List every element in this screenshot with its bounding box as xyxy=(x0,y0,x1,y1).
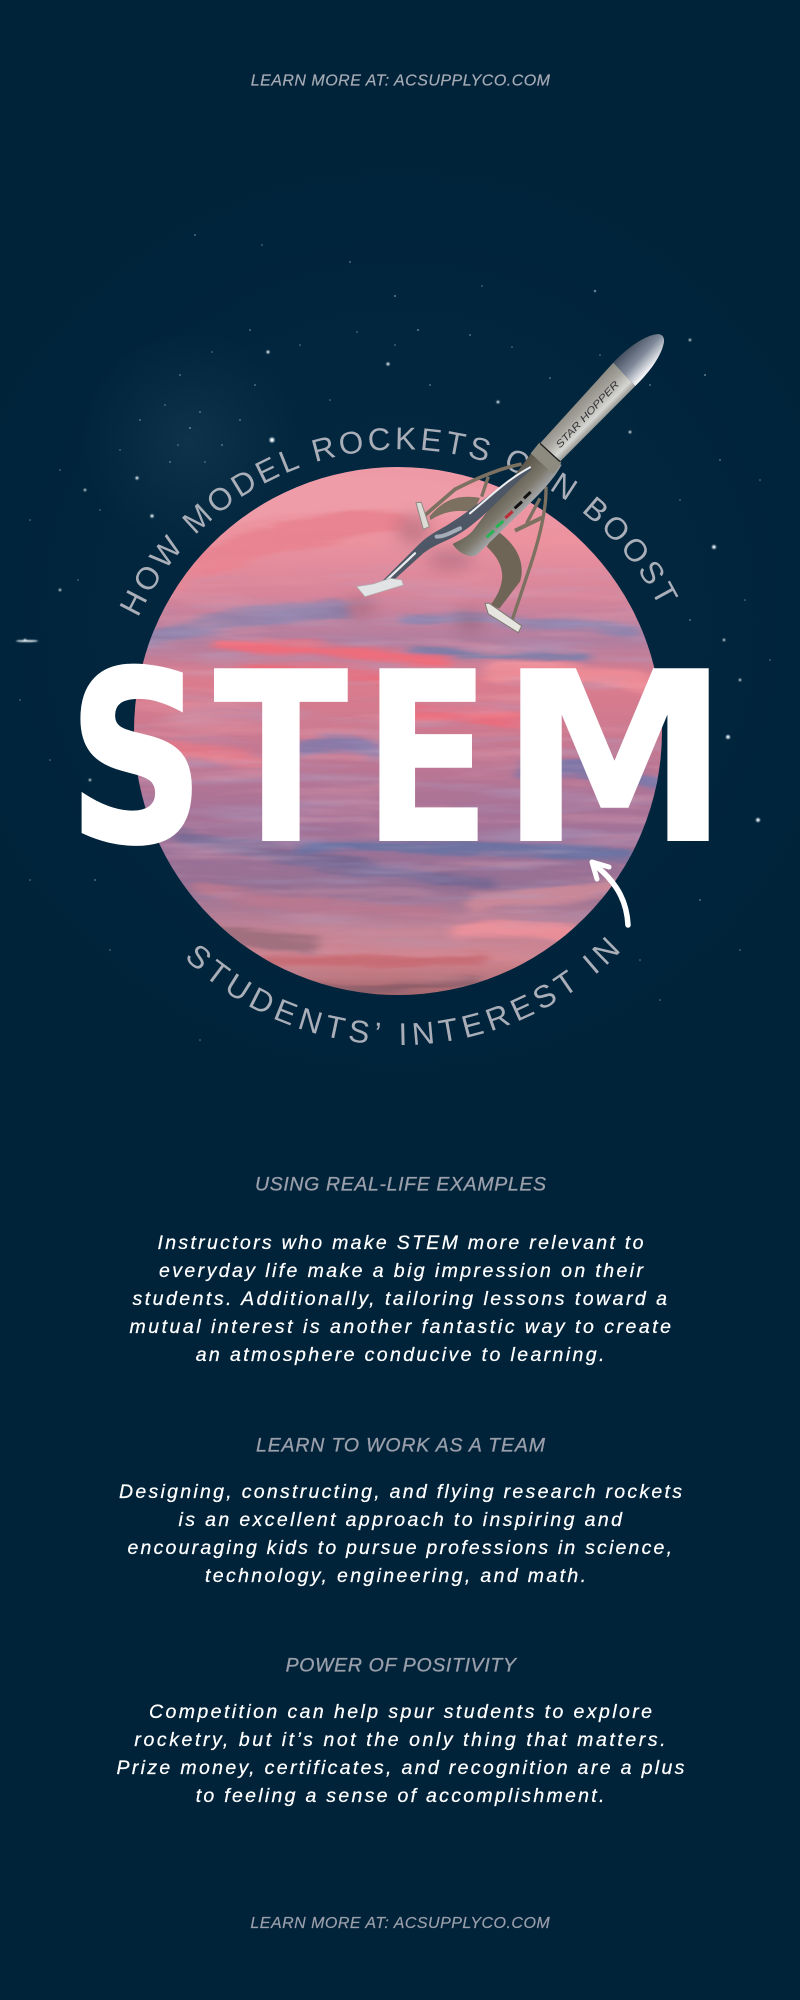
section 2 body: technology, engineering, and math. xyxy=(205,1565,586,1587)
curved heading: top: HOW MODEL ROCKETS CAN BOOST xyxy=(120,428,678,616)
section 2 body: is an excellent approach to inspiring and xyxy=(178,1509,623,1531)
section 2 body: encouraging kids to pursue professions in science, xyxy=(128,1537,672,1559)
starfield xyxy=(0,150,800,1150)
section 1 xyxy=(130,1174,671,1366)
section 3 heading: POWER OF POSITIVITY xyxy=(286,1655,518,1677)
section 3 body: Competition can help spur students to explore xyxy=(149,1701,652,1723)
section 3 body: Prize money, certificates, and recognition are a plus xyxy=(116,1757,685,1779)
section 3 body xyxy=(116,1701,685,1807)
nose cone xyxy=(613,334,664,386)
section 1 body: everyday life make a big impression on their xyxy=(159,1260,644,1282)
section 1 body: mutual interest is another fantastic way to create xyxy=(130,1316,671,1338)
section 3 body: to feeling a sense of accomplishment. xyxy=(196,1785,604,1807)
section 2 heading: LEARN TO WORK AS A TEAM xyxy=(256,1435,546,1457)
section 1 body: students. Additionally, tailoring lessons toward a xyxy=(132,1288,667,1310)
title: STEM: M xyxy=(499,622,730,898)
section 1 body xyxy=(130,1232,671,1366)
section 3 body: rocketry, but it’s not the only thing that matters. xyxy=(134,1729,666,1751)
section 1 heading: USING REAL-LIFE EXAMPLES xyxy=(255,1174,546,1196)
rocket shadows xyxy=(343,515,485,633)
section 1 body: Instructors who make STEM more relevant to xyxy=(158,1232,644,1254)
arrow xyxy=(592,862,628,925)
status lights xyxy=(487,492,531,537)
body collar xyxy=(531,443,561,474)
left upper foot xyxy=(416,502,429,529)
title: STEM: T xyxy=(213,621,349,897)
launch leg highlight xyxy=(385,467,530,582)
footer link: LEARN MORE AT: ACSUPPLYCO.COM xyxy=(250,1915,550,1932)
right foot xyxy=(485,603,522,633)
section 2 xyxy=(119,1435,682,1587)
launch foot xyxy=(357,578,403,597)
title: STEM: S xyxy=(68,621,205,897)
rocket label: STAR HOPPER xyxy=(554,379,622,451)
right struts xyxy=(510,487,546,627)
section 2 body: Designing, constructing, and flying research rockets xyxy=(119,1481,682,1503)
section 3 xyxy=(116,1655,685,1807)
planet xyxy=(134,467,662,995)
rocket tube xyxy=(540,363,635,462)
rocket xyxy=(343,334,664,633)
left upper fin xyxy=(423,464,522,517)
left crescent fin xyxy=(429,497,480,520)
curved heading: bottom: STUDENTS’ INTEREST IN xyxy=(187,936,620,1045)
section 2 body xyxy=(119,1481,682,1587)
launch leg xyxy=(382,466,532,585)
title: STEM xyxy=(68,621,730,898)
section 1 body: an atmosphere conducive to learning. xyxy=(196,1344,604,1366)
title: STEM: E xyxy=(362,621,492,897)
lower body xyxy=(453,448,562,556)
right crescent fin xyxy=(487,531,522,609)
header link: LEARN MORE AT: ACSUPPLYCO.COM xyxy=(251,72,551,90)
